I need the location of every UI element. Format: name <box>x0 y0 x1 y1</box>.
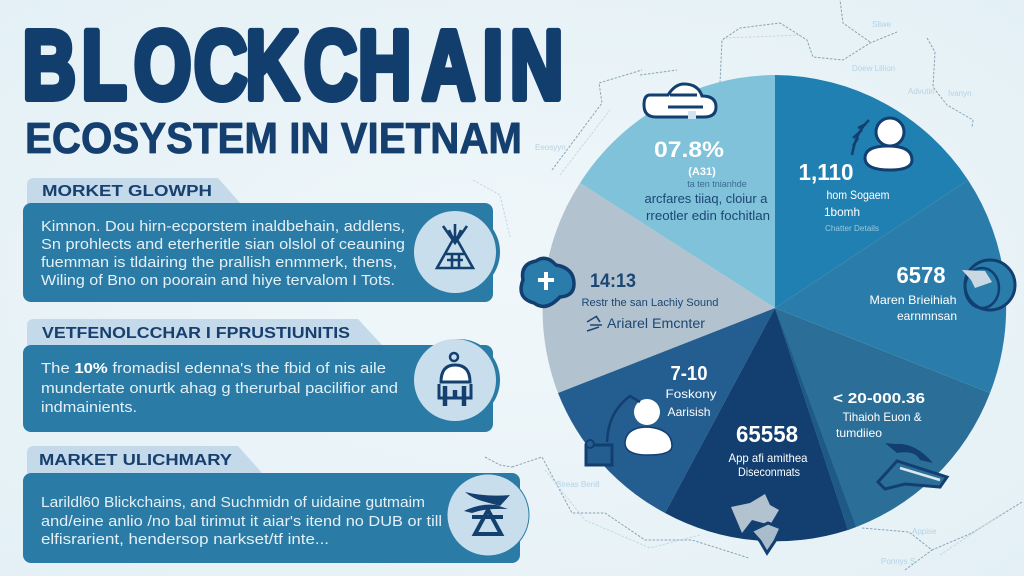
faint map labels: Bireas Ben8 <box>556 480 600 489</box>
panel 3 text: elfisrarient, hendersop narkset/tf inte... <box>41 531 329 548</box>
slice: navy <box>665 308 848 541</box>
label: right blue slice: 6578 <box>896 262 946 288</box>
label: light blue slice <box>644 137 770 223</box>
label: mid navy slice <box>666 363 716 419</box>
icon: person with box <box>586 396 672 465</box>
label: top blue slice: Chatter Details <box>825 224 879 233</box>
label: light blue slice: arcfares tiiaq, cloiur a <box>644 192 768 206</box>
title <box>23 12 563 163</box>
panel 1 tab <box>27 178 241 204</box>
label: navy slice <box>728 421 808 479</box>
panel 2 text <box>41 360 398 416</box>
icon: cloud plane <box>521 258 574 306</box>
slice: blue top <box>775 75 968 308</box>
panel: market summary <box>23 446 529 563</box>
panel 2 text: mundertate onurtk ahag g therurbal pacilifior and <box>41 380 398 397</box>
panel 3 text: and/eine anlio /no bal tirimut it aiar's itend no DUB or till <box>41 513 442 530</box>
faint map labels: Appise <box>912 527 937 536</box>
label: mid navy slice: Foskony <box>666 387 716 401</box>
label: right blue slice <box>870 262 957 323</box>
icon: domed temple <box>414 339 500 421</box>
slice: light blue <box>580 75 775 308</box>
icon: flag and triangle <box>447 474 529 556</box>
label: grey slice: Ariarel Emcnter <box>607 316 706 331</box>
label: grey slice: 14:13 <box>590 271 636 292</box>
label: teal slice: Tihaioh Euon & <box>842 410 922 424</box>
panel 1 text: Wiling of Bno on poorain and hiye tervalom I Tots. <box>41 272 395 289</box>
faint map labels: Sliwe <box>872 20 892 29</box>
label: mid navy slice: Aarisish <box>668 405 710 419</box>
panel 1 text: Kimnon. Dou hirn-ecporstem inaldbehain, addlens, <box>41 218 405 235</box>
panel 1 text <box>41 218 405 289</box>
panel 3 tab <box>27 446 262 473</box>
panel 3 heading: MARKET ULICHMARY <box>39 452 232 469</box>
title line 1: BLOCKCHAIN <box>23 12 563 120</box>
panel 3 text <box>41 494 442 548</box>
label: top blue slice: 1bomh <box>824 205 860 219</box>
icon: bird in circle <box>962 260 1015 310</box>
panel 2 body <box>23 345 493 432</box>
icon: small scribble <box>587 316 602 331</box>
label: top blue slice: 1,110 <box>798 159 854 185</box>
faint map labels: Advutin <box>908 87 935 96</box>
label: grey slice: Restr the san Lachiy Sound <box>582 297 718 309</box>
label: mid navy slice: 7-10 <box>670 363 708 385</box>
panel: market growth <box>23 178 500 302</box>
label: top blue slice: hom Sogaem <box>826 188 890 202</box>
panel 2 text: The 10% fromadisl edenna's the fbid of nis aile <box>41 360 386 377</box>
panel 2 text: indmainients. <box>41 399 137 416</box>
panel 2 tab <box>27 319 382 345</box>
icon: paired stars <box>731 494 781 553</box>
label: right blue slice: earnmnsan <box>897 309 957 323</box>
faint map labels: Doew Lillion <box>852 64 895 73</box>
panel 1 body <box>23 203 493 302</box>
panel 1 heading: MORKET GLOWPH <box>42 183 212 200</box>
slice: teal steel <box>775 308 990 530</box>
label: teal slice <box>833 390 925 440</box>
panel 1 text: Sn prohlects and eterheritle sian olslol of ceauning <box>41 236 405 253</box>
icon: boat shoe <box>878 443 947 489</box>
faint map labels: Ivanyn <box>948 89 972 98</box>
label: right blue slice: Maren Brieihiah <box>870 293 956 307</box>
label: teal slice: < 20-000.36 <box>833 390 925 407</box>
label: teal slice: tumdiieo <box>836 426 882 440</box>
panel 1 text: fuemman is tldairing the prallish enmmerk, thens, <box>41 254 397 271</box>
label: light blue slice: (A31) <box>688 166 716 178</box>
panel 3 body <box>23 473 520 563</box>
icon: cloud device <box>644 84 716 119</box>
panel: opportunities <box>23 319 500 432</box>
faint map labels <box>535 20 972 566</box>
label: navy slice: 65558 <box>736 421 798 447</box>
slice: thin divider wedge <box>775 308 856 530</box>
faint map labels: Eeosyyn <box>535 143 566 152</box>
slice: grey <box>543 183 775 393</box>
label: light blue slice: 07.8% <box>654 137 724 162</box>
slice: blue right <box>775 180 1006 393</box>
label: light blue slice: rreotler edin fochitlan <box>646 209 770 223</box>
label: navy slice: Diseconmats <box>738 465 800 479</box>
panel 2 heading: VETFENOLCCHAR I FPRUSTIUNITIS <box>42 325 350 342</box>
decorative map outline <box>473 0 1022 570</box>
icon: pagoda tent <box>414 211 500 293</box>
pie chart <box>521 75 1015 553</box>
label: top blue slice <box>798 159 890 233</box>
label: light blue slice: ta ten tnianhde <box>687 179 747 189</box>
icon: person with leaf <box>852 118 912 170</box>
panel 3 text: Larildl60 Blickchains, and Suchmidn of uidaine gutmaim <box>41 494 425 511</box>
label: navy slice: App afi amithea <box>728 451 808 465</box>
label: grey slice <box>582 271 718 331</box>
faint map labels: Ponnys S <box>881 557 915 566</box>
title line 2: ECOSYSTEM IN VIETNAM <box>25 114 522 163</box>
slice: mid navy <box>558 308 775 513</box>
